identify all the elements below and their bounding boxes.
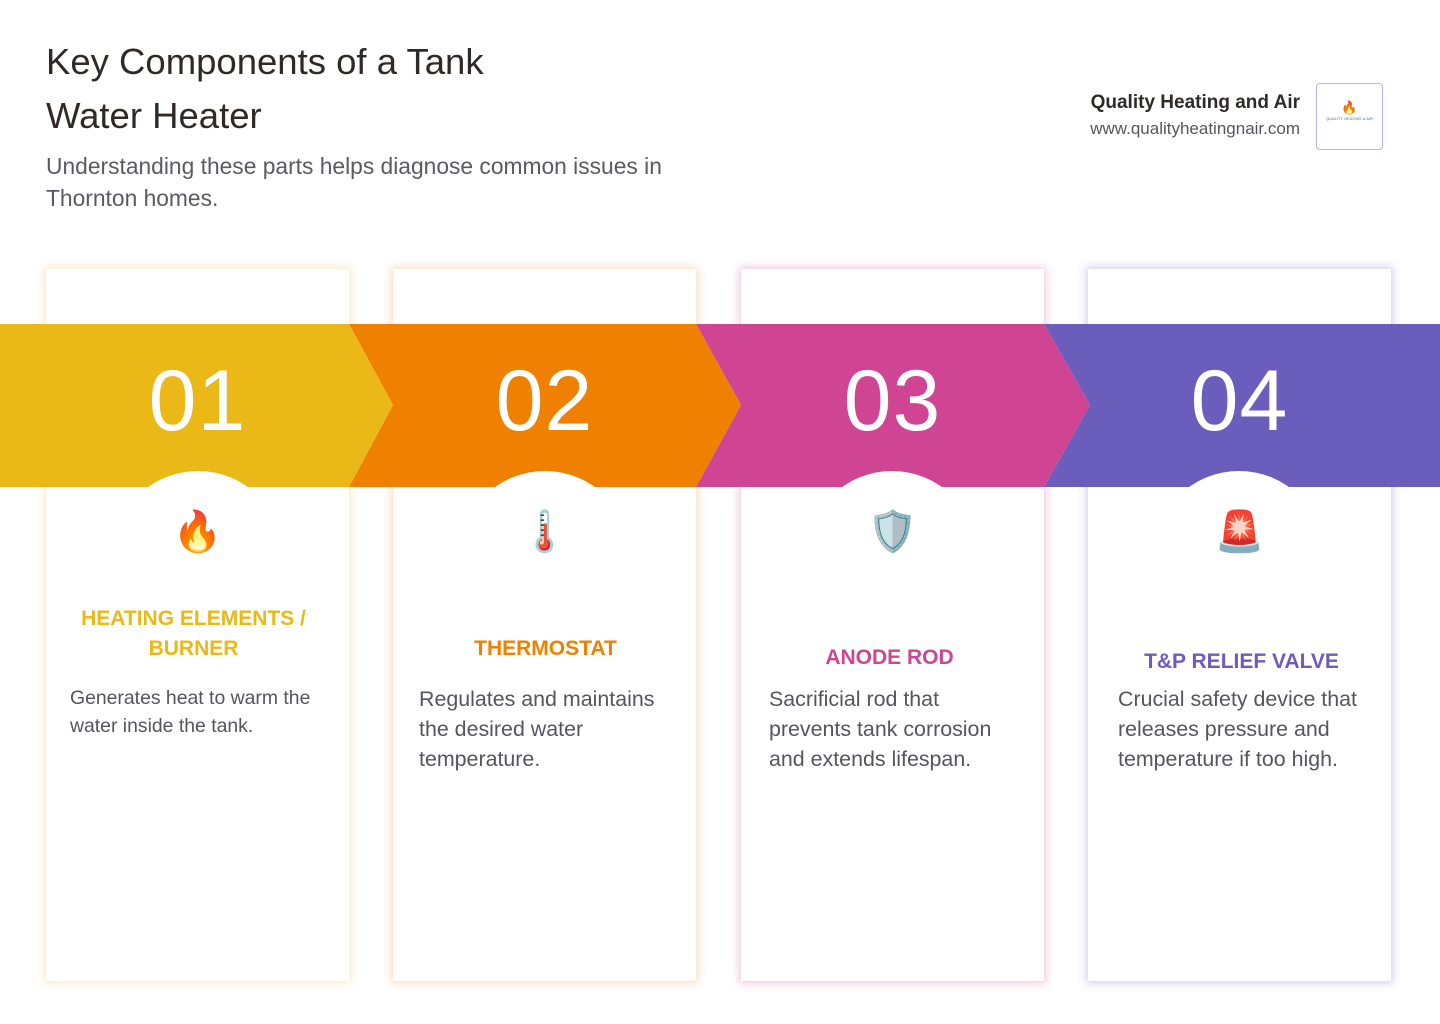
card 1 text: BURNER bbox=[149, 637, 238, 660]
text: Generates heat to warm the bbox=[70, 687, 310, 709]
card 1 text bbox=[81, 607, 306, 660]
numbers: 01 bbox=[149, 353, 246, 449]
title bbox=[46, 41, 484, 136]
brand text: www.qualityheatingnair.com bbox=[1090, 119, 1300, 138]
subtitle bbox=[46, 153, 662, 211]
cards bbox=[46, 269, 349, 981]
text: prevents tank corrosion bbox=[769, 717, 991, 741]
text: water inside the tank. bbox=[70, 715, 253, 737]
logo box: 🔥 bbox=[1341, 100, 1358, 115]
text: and extends lifespan. bbox=[769, 747, 971, 771]
brand text: Quality Heating and Air bbox=[1091, 92, 1300, 113]
chevron band bbox=[0, 324, 1440, 487]
subtitle: Understanding these parts helps diagnose common issues in bbox=[46, 153, 662, 179]
brand text bbox=[1090, 92, 1300, 138]
card 3 text: ANODE ROD bbox=[825, 646, 954, 669]
text: 🌡️ bbox=[520, 510, 569, 554]
text: Regulates and maintains bbox=[419, 687, 654, 711]
text: 🚨 bbox=[1215, 510, 1264, 554]
title: Key Components of a Tank bbox=[46, 41, 484, 82]
brand block bbox=[1090, 83, 1383, 150]
subtitle: Thornton homes. bbox=[46, 185, 218, 211]
icons: 🔥 bbox=[173, 510, 222, 554]
title: Water Heater bbox=[46, 95, 262, 136]
card 4 text: T&P RELIEF VALVE bbox=[1144, 650, 1339, 673]
circles bbox=[112, 471, 284, 643]
text: releases pressure and bbox=[1118, 717, 1330, 741]
text: temperature if too high. bbox=[1118, 747, 1338, 771]
text: Crucial safety device that bbox=[1118, 687, 1357, 711]
text: the desired water bbox=[419, 717, 583, 741]
text: temperature. bbox=[419, 747, 540, 771]
text: 04 bbox=[1191, 353, 1288, 449]
card 2 text: THERMOSTAT bbox=[474, 637, 617, 660]
text: Sacrificial rod that bbox=[769, 687, 939, 711]
card 1 text: HEATING ELEMENTS / bbox=[81, 607, 306, 630]
logo box bbox=[1316, 83, 1383, 150]
text: 🛡️ bbox=[868, 510, 917, 554]
text: 02 bbox=[496, 353, 593, 449]
text: 03 bbox=[844, 353, 941, 449]
logo box: QUALITY HEATING & AIR bbox=[1326, 116, 1373, 121]
